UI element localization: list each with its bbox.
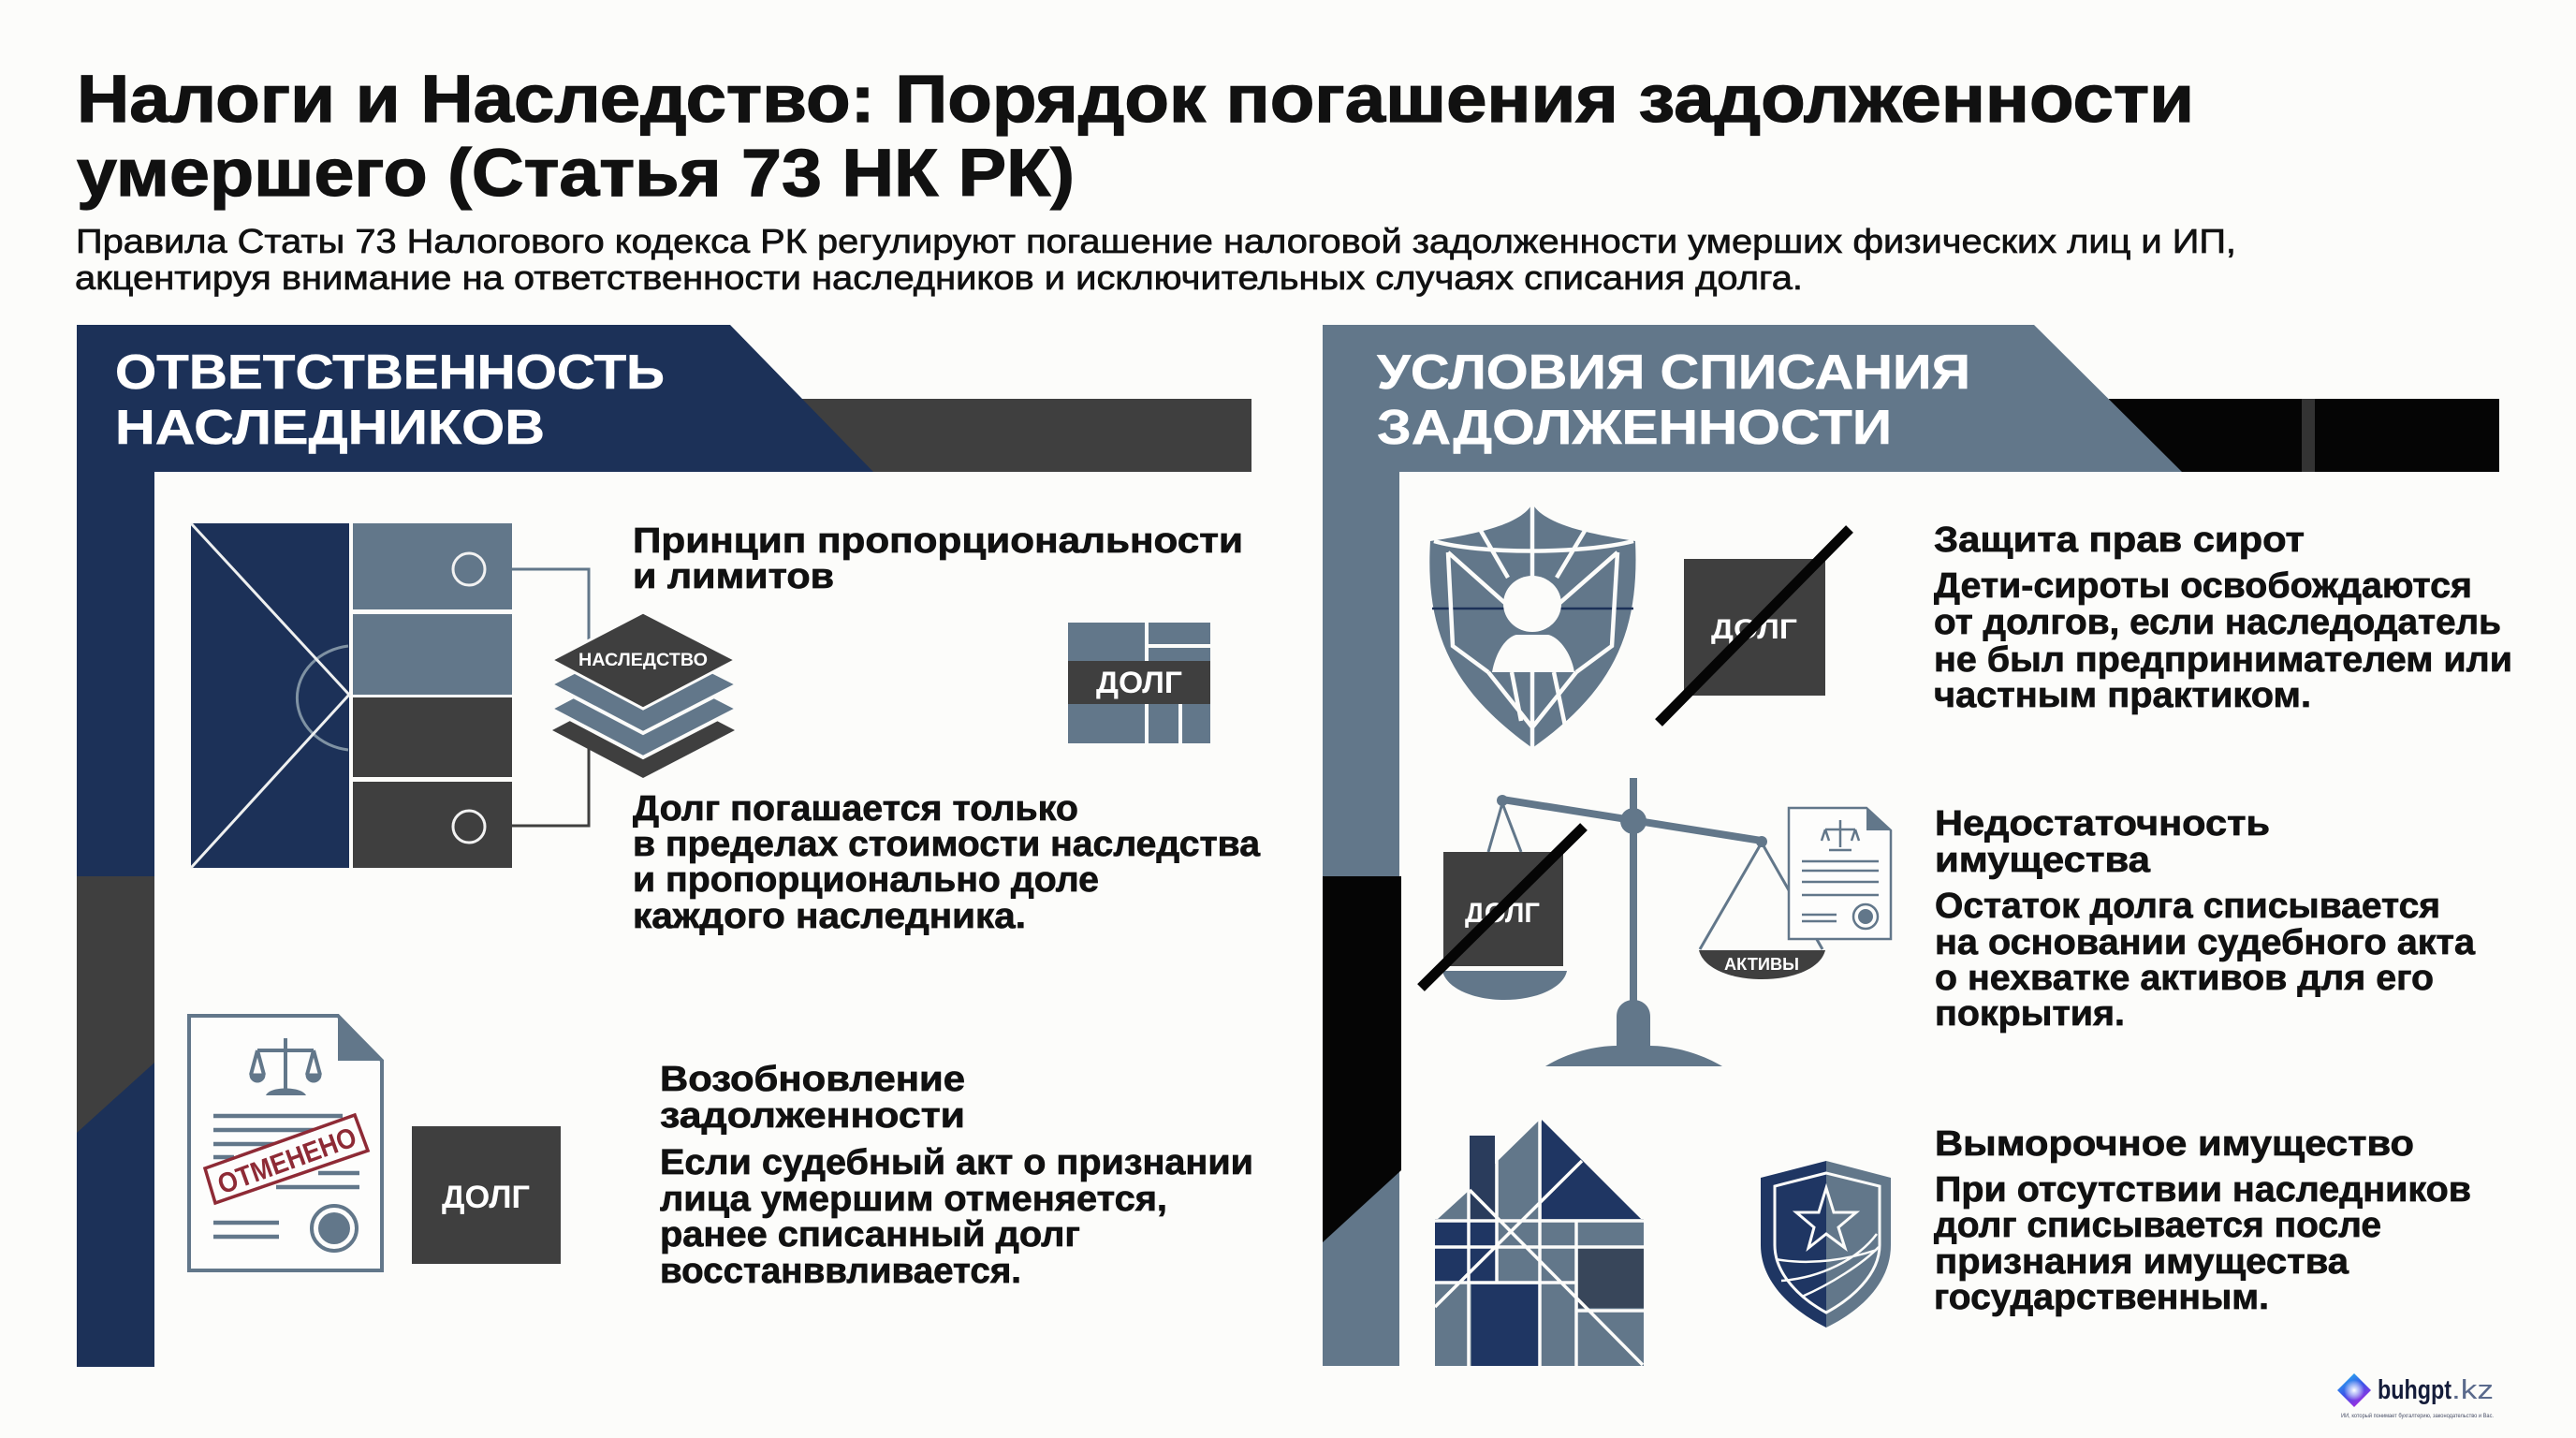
- icon: crossed-out debt: ДОЛГ: [1711, 614, 1797, 645]
- icon: state shield with star: [1761, 1161, 1891, 1328]
- panel heading: ЗАДОЛЖЕННОСТИ: [1377, 401, 1892, 455]
- text: debt renewal heading: Возобновление: [660, 1060, 965, 1099]
- text: proportionality heading: [633, 521, 1243, 596]
- text: insufficient property: имущества: [1935, 841, 2151, 880]
- text: orphans: от долгов, если наследодатель: [1934, 603, 2501, 642]
- text: proportionality body: в пределах стоимости наследства: [633, 825, 1261, 864]
- text: proportionality heading: и лимитов: [633, 557, 834, 596]
- text: orphans: Защита прав сирот: [1934, 521, 2305, 560]
- icon: balance scale: [1421, 778, 1825, 1066]
- text: proportionality body: Долг погашается только: [633, 789, 1078, 829]
- logo: buhgpt.kz: [2337, 1373, 2494, 1419]
- text: orphans: частным практиком.: [1934, 676, 2311, 715]
- panel frame: navy and dark L-shape: [77, 325, 1251, 1367]
- panel heading: ОТВЕТСТВЕННОСТЬ: [115, 345, 665, 400]
- text: insufficient property: на основании судебного акта: [1935, 923, 2476, 962]
- text: orphans: не был предпринимателем или: [1934, 640, 2512, 680]
- text: insufficient property: Остаток долга списывается: [1935, 887, 2440, 926]
- subtitle: акцентируя внимание на ответственности наследников и исключительных случаях списания долга.: [75, 258, 1803, 297]
- text: insufficient property: о нехватке активов для его: [1935, 959, 2434, 998]
- icon: cancelled document: ОТМЕНЕНО: [213, 1122, 360, 1200]
- icon: cancelled document: [189, 1016, 382, 1270]
- logo: buhgpt.kz: .kz: [2452, 1375, 2494, 1405]
- text: debt renewal body: ранее списанный долг: [660, 1215, 1080, 1255]
- panel heading: УСЛОВИЯ СПИСАНИЯ: [1377, 345, 1970, 400]
- icon: balance scale: АКТИВЫ: [1724, 955, 1799, 974]
- text: insufficient property: Недостаточность: [1935, 804, 2270, 844]
- icon: balance scale: ДОЛГ: [1465, 898, 1540, 929]
- text: insufficient property: [1935, 804, 2476, 1034]
- icon: orphan shield: [1429, 504, 1636, 748]
- text: proportionality heading: Принцип пропорциональности: [633, 521, 1243, 561]
- text: proportionality body: [633, 789, 1261, 936]
- text: escheat property: государственным.: [1934, 1278, 2269, 1317]
- panel frame: slate and black L-shape: [1323, 325, 2499, 1366]
- text: orphans: [1934, 521, 2512, 715]
- logo: buhgpt.kz: buhgpt: [2378, 1375, 2452, 1405]
- panel: write-off conditions: [1323, 325, 2512, 1366]
- text: escheat property: [1934, 1124, 2471, 1317]
- icon: debt block: ДОЛГ: [1096, 666, 1182, 699]
- icon: crossed-out debt: [1659, 529, 1850, 723]
- text: insufficient property: покрытия.: [1935, 994, 2125, 1034]
- title: [77, 63, 2194, 211]
- subtitle: Правила Статы 73 Налогового кодекса РК регулируют погашение налоговой задолженности умерших физических лиц и ИП,: [76, 222, 2236, 260]
- text: debt renewal body: Если судебный акт о признании: [660, 1143, 1253, 1182]
- text: debt renewal heading: задолженности: [660, 1096, 965, 1136]
- text: debt renewal body: [660, 1143, 1253, 1291]
- icon: geometric house: [1435, 1120, 1644, 1366]
- text: debt renewal heading: [660, 1060, 965, 1136]
- icon: inheritance split with stack: НАСЛЕДСТВО: [578, 651, 708, 670]
- text: escheat property: При отсутствии наследников: [1935, 1170, 2471, 1210]
- text: escheat property: Выморочное имущество: [1935, 1124, 2414, 1164]
- subtitle: [75, 222, 2236, 297]
- text: debt renewal body: лица умершим отменяется,: [660, 1180, 1167, 1219]
- text: proportionality body: каждого наследника.: [633, 897, 1026, 936]
- text: debt renewal body: восстанввливается.: [660, 1252, 1021, 1291]
- panel heading: [115, 345, 665, 455]
- icon: inheritance split with stack: [191, 523, 738, 868]
- icon: court document: [1789, 808, 1891, 939]
- text: escheat property: признания имущества: [1935, 1242, 2349, 1282]
- text: proportionality body: и пропорционально доле: [633, 860, 1099, 900]
- icon: debt block: [1068, 623, 1210, 743]
- panel: heirs responsibility: [77, 325, 1261, 1367]
- panel heading: [1377, 345, 1970, 455]
- text: orphans: Дети-сироты освобождаются: [1934, 566, 2472, 606]
- icon: debt box: [412, 1126, 561, 1264]
- icon: debt box: ДОЛГ: [442, 1180, 530, 1215]
- text: escheat property: долг списывается после: [1934, 1206, 2381, 1245]
- title: умершего (Статья 73 НК РК): [77, 137, 1075, 211]
- title: Налоги и Наследство: Порядок погашения задолженности: [77, 63, 2194, 137]
- logo: buhgpt.kz: ИИ, который понимает бухгалтерию, законодательство и Вас.: [2341, 1412, 2494, 1419]
- panel heading: НАСЛЕДНИКОВ: [115, 401, 545, 455]
